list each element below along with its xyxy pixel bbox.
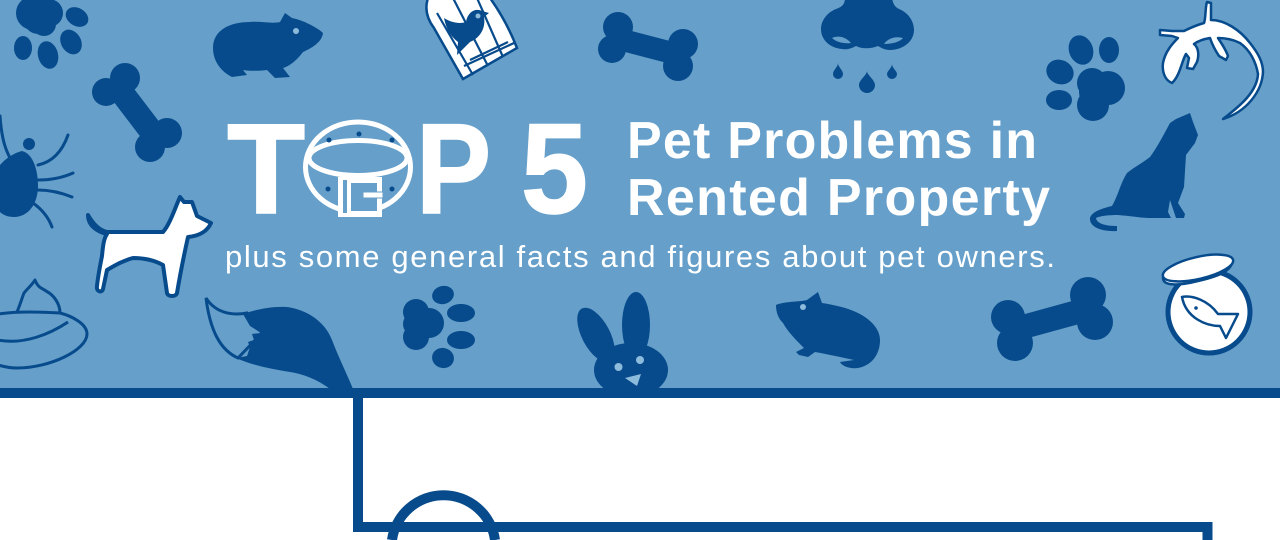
heading: pet problems: Pet Problems in <box>627 112 1037 170</box>
letter P: P <box>416 97 491 241</box>
icon: guinea pig bottom <box>776 292 880 368</box>
icon: runny nose <box>821 0 914 93</box>
heading: pet problems: Rented Property <box>627 169 1050 227</box>
title: TOP 5 <box>227 97 588 241</box>
numeral 5: 5 <box>521 99 588 241</box>
icon: lizard <box>1160 2 1263 119</box>
icon: bone left <box>92 63 182 162</box>
connector frame with circle <box>358 395 1208 540</box>
icon: paw top left <box>14 0 92 71</box>
letter T: T <box>227 98 305 241</box>
heading: pet problems <box>627 112 1050 227</box>
subtitle: plus some general facts and figures about pet owners. <box>225 239 1055 274</box>
header bottom rule <box>0 388 1280 398</box>
icon: fish bowl <box>1160 249 1250 353</box>
icon: bird cage <box>426 0 517 79</box>
icon: rabbit <box>570 292 668 397</box>
icon: poop <box>0 280 87 368</box>
icon: sitting cat <box>1090 113 1198 231</box>
icon: guinea pig top <box>213 13 323 78</box>
icon: fox tail <box>206 298 353 389</box>
icon: paw top right <box>1042 32 1125 121</box>
icon: white dog <box>88 197 211 296</box>
icon: bone top centre <box>598 12 698 81</box>
icon: collar as letter O <box>306 122 410 217</box>
panel: blue header band <box>0 0 1280 389</box>
icon: paw bottom centre <box>403 283 475 371</box>
icon: bone bottom right <box>991 277 1113 361</box>
icon: tick <box>0 116 73 227</box>
